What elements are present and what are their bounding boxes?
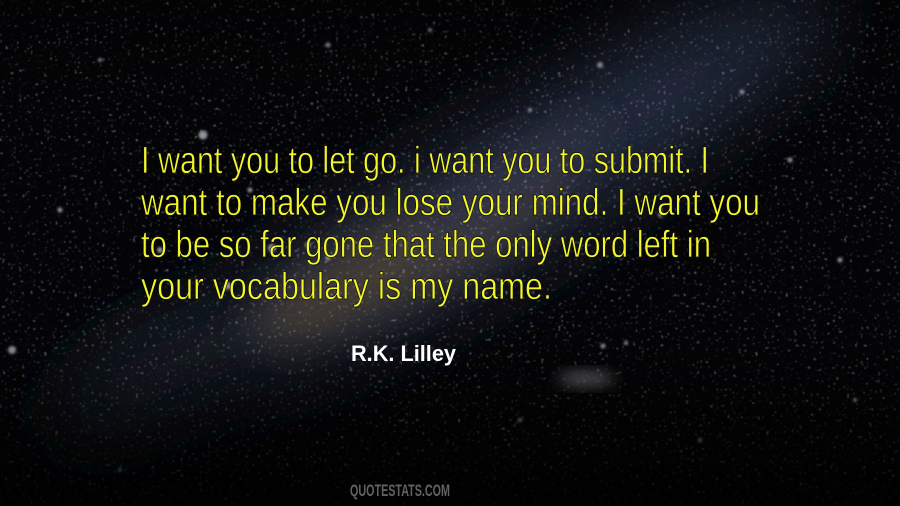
quote text: want to make you lose your mind. I want you [140,182,760,224]
author name: R.K. Lilley [351,341,457,366]
quote text: to be so far gone that the only word left in [141,224,711,266]
watermark: QUOTESTATS.COM [350,481,450,500]
quote text: your vocabulary is my name. [141,266,552,308]
quote text: I want you to let go. i want you to submit. I [141,140,709,182]
quote text [140,140,760,308]
background: small galaxy smudge [558,372,614,386]
